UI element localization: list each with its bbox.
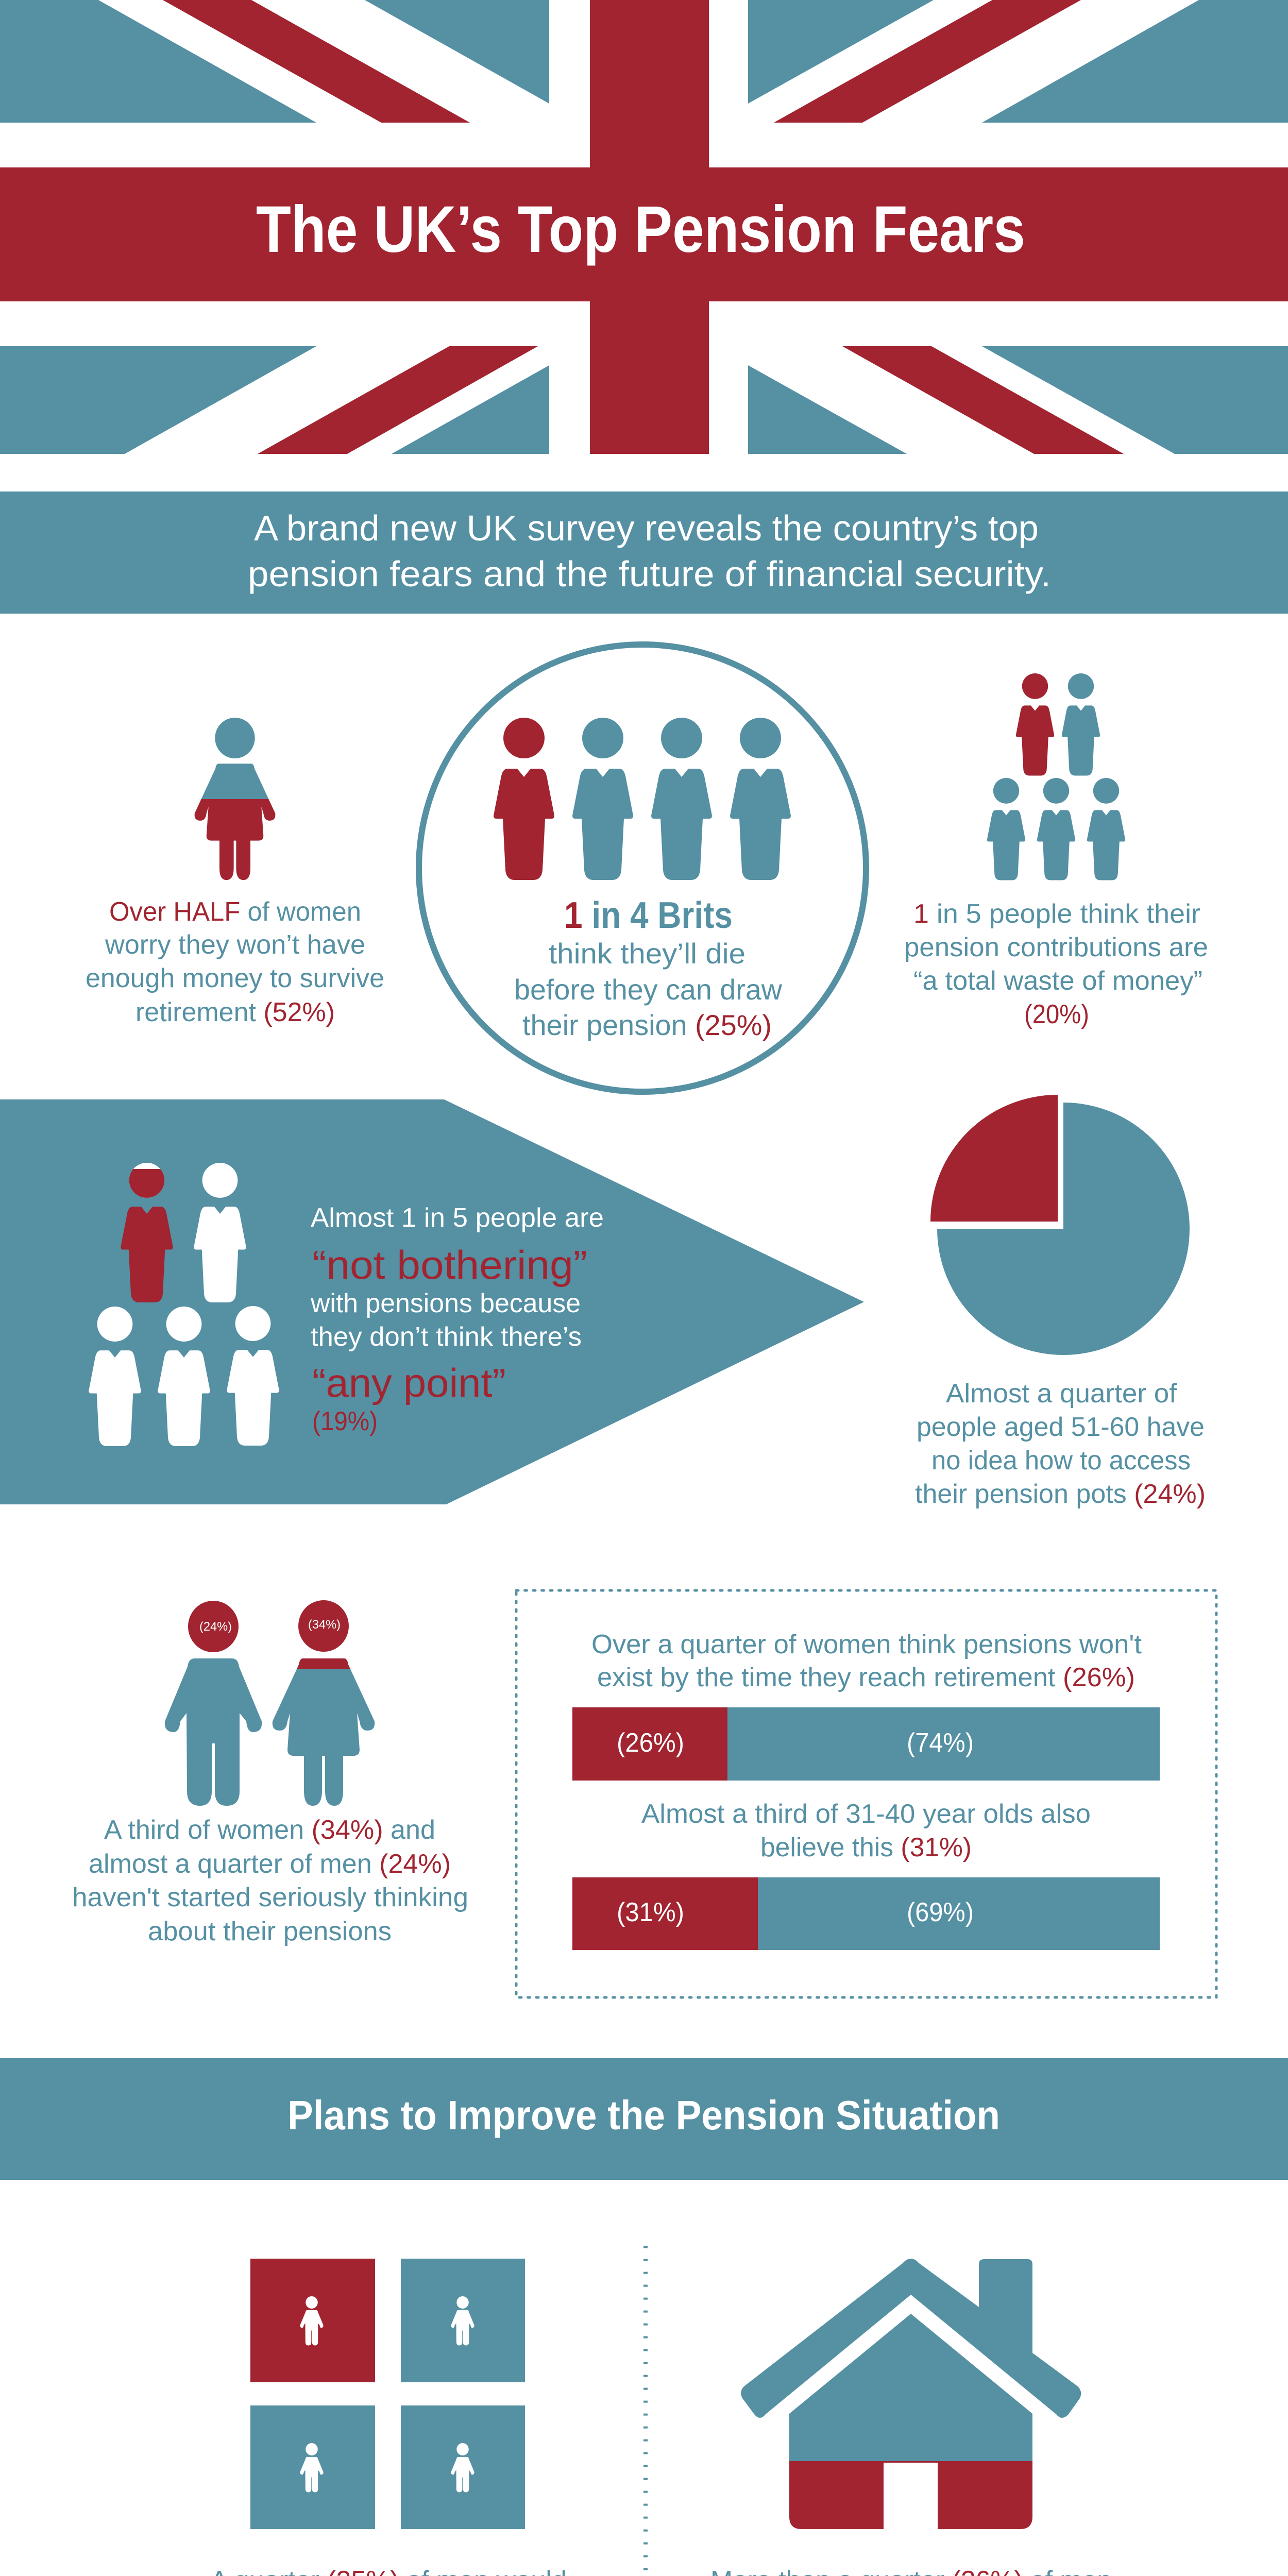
- text: not bothering: with pensions because: [310, 1289, 581, 1318]
- icon: man: (24%): [199, 1620, 232, 1634]
- intro band: [0, 492, 1288, 614]
- bar chart: 31 vs 69: (31%): [617, 1897, 684, 1927]
- icon: half-filled woman: [195, 718, 275, 880]
- icon: four people: [494, 718, 791, 880]
- icon: five people pyramid: [987, 673, 1125, 880]
- intro band: pension fears and the future of financial security.: [248, 554, 1051, 594]
- text: not bothering: “any point”: [312, 1360, 506, 1405]
- pie chart: [930, 1095, 1190, 1355]
- panel: real estate investment: [710, 2259, 1112, 2576]
- flag banner: [0, 0, 1288, 454]
- icon: woman: [273, 1600, 375, 1806]
- intro band: A brand new UK survey reveals the country’s top: [254, 508, 1039, 548]
- panel: not bothering arrow: [0, 1099, 864, 1504]
- text: a third of women: about their pensions: [148, 1917, 392, 1946]
- text: almost a quarter: people aged 51-60 have: [917, 1412, 1205, 1442]
- text: over half of women: enough money to survive: [86, 963, 384, 993]
- text: over half of women: retirement (52%): [135, 997, 335, 1027]
- text: 1 in 4 Brits: before they can draw: [514, 973, 783, 1006]
- heading band: plans to improve: Plans to Improve the Pension Situation: [287, 2092, 1000, 2138]
- text: not bothering: they don’t think there’s: [311, 1322, 582, 1352]
- text: a third of women: A third of women (34%) and: [104, 1815, 435, 1845]
- text: 1 in 5 people: 1 in 5 people think their: [913, 899, 1200, 929]
- icon: four squares with people: [250, 2259, 525, 2529]
- bar chart: 26 vs 74: [572, 1707, 1160, 1781]
- panel: man and woman not thinking about pensions: [72, 1600, 468, 1946]
- text: over half of women: [86, 897, 384, 1027]
- icon: woman: (34%): [308, 1618, 341, 1632]
- text: 1 in 5 people: pension contributions are: [904, 933, 1208, 962]
- text: not bothering: Almost 1 in 5 people are: [311, 1203, 604, 1233]
- text: almost a third of 31-40: Almost a third of 31-40 year olds also: [641, 1799, 1091, 1829]
- text: over a quarter of women: exist by the time they reach retirement (26%): [597, 1663, 1135, 1692]
- text: over a quarter of women: [591, 1630, 1142, 1692]
- panel: pie chart 24%: [915, 1095, 1206, 1509]
- text: 1 in 4 Brits: think they’ll die: [549, 937, 745, 970]
- bar chart: 31 vs 69: [572, 1877, 1160, 1950]
- panel: 1 in 4 Brits circle: [419, 645, 866, 1092]
- panel: property investment: [175, 2259, 600, 2576]
- text: over half of women: worry they won’t have: [105, 930, 365, 960]
- text: 1 in 5 people: “a total waste of money”: [913, 966, 1202, 996]
- icon: house: [741, 2259, 1081, 2529]
- panel: dotted box with bars: [516, 1590, 1216, 1997]
- text: not bothering: (19%): [312, 1406, 378, 1436]
- text: over a quarter of women: Over a quarter of women think pensions won't: [591, 1630, 1142, 1659]
- icon: man: [165, 1601, 262, 1806]
- text: not bothering: [310, 1203, 604, 1436]
- text: 1 in 4 Brits: [514, 895, 783, 1041]
- text: 1 in 5 people: (20%): [1024, 999, 1089, 1029]
- title: The UK’s Top Pension Fears: [256, 193, 1025, 266]
- text: almost a quarter: no idea how to access: [931, 1446, 1191, 1476]
- text: a third of women: almost a quarter of men (24%): [89, 1849, 451, 1879]
- text: 1 in 4 Brits: 1 in 4 Brits: [564, 895, 733, 936]
- panel: 1 in 5 waste of money: [904, 673, 1208, 1029]
- heading band: plans to improve: [0, 2058, 1288, 2180]
- bar chart: 26 vs 74: (26%): [617, 1728, 684, 1758]
- icon: five people white: [89, 1163, 279, 1446]
- text: almost a quarter: Almost a quarter of: [946, 1379, 1177, 1409]
- text: a third of women: haven't started seriously thinking: [72, 1883, 468, 1912]
- bar chart: 26 vs 74: (74%): [907, 1728, 974, 1758]
- text: almost a third of 31-40: believe this (31%): [760, 1833, 972, 1862]
- text: a third of women: [72, 1815, 468, 1946]
- text: almost a quarter: their pension pots (24%): [915, 1479, 1206, 1509]
- text: not bothering: “not bothering”: [312, 1242, 587, 1287]
- panel: women retirement worry: [86, 718, 384, 1027]
- text: 1 in 4 Brits: their pension (25%): [522, 1009, 772, 1041]
- text: almost a third of 31-40: [641, 1799, 1091, 1862]
- text: over half of women: Over HALF of women: [109, 897, 361, 927]
- text: almost a quarter: [915, 1379, 1206, 1509]
- bar chart: 31 vs 69: (69%): [907, 1897, 974, 1927]
- text: 1 in 5 people: [904, 899, 1208, 1029]
